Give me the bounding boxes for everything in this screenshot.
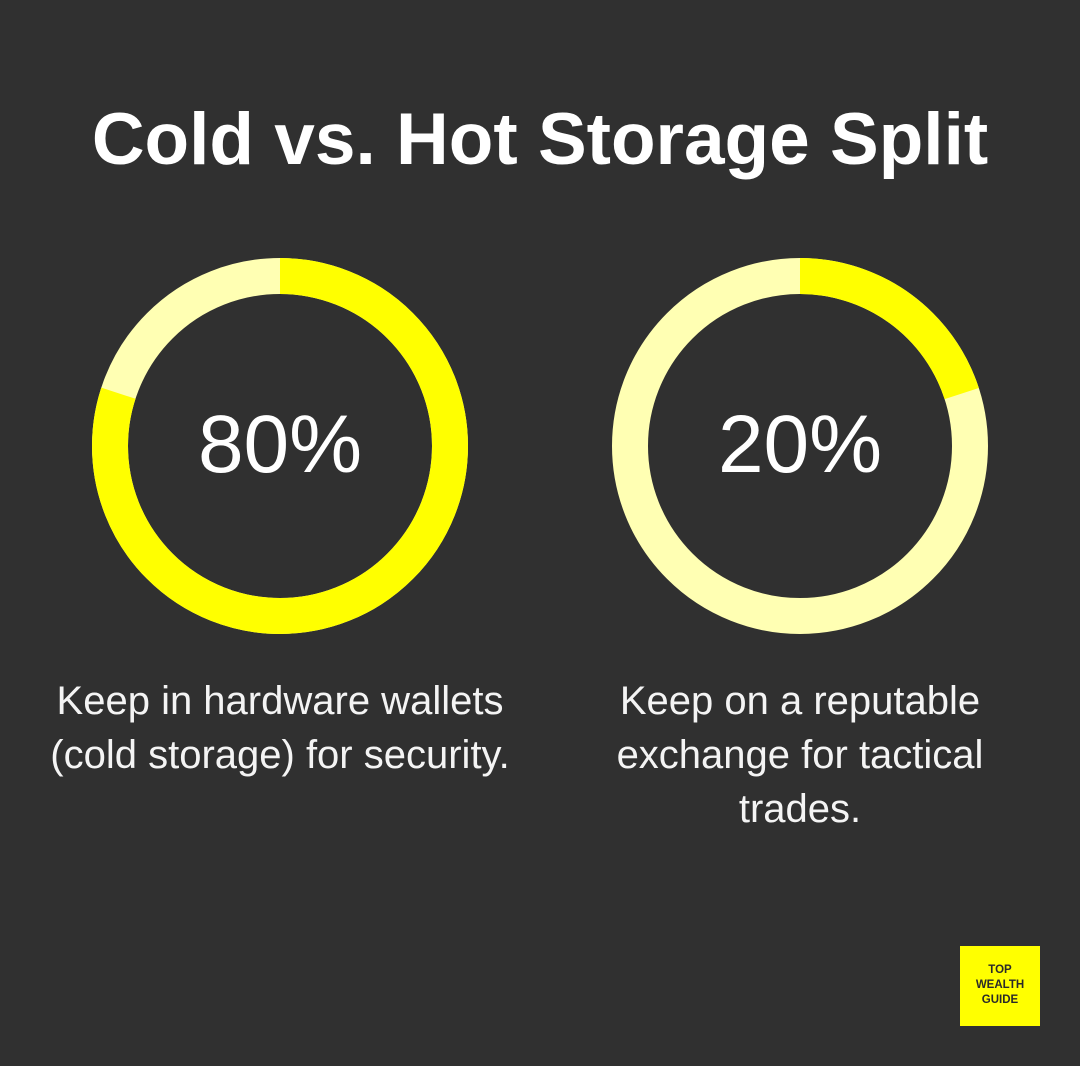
caption: cold storage: (cold storage) for security. [50,733,510,777]
logo: TOP [988,964,1012,976]
caption: hot storage: exchange for tactical [617,733,983,777]
donut: 20% [630,276,970,616]
title: Cold vs. Hot Storage Split [92,99,988,180]
caption: hot storage: trades. [739,787,861,831]
caption: hot storage [617,679,983,831]
donut: 80% [110,276,450,616]
caption: cold storage: Keep in hardware wallets [57,679,503,723]
logo [960,946,1040,1026]
donut charts [92,258,988,634]
caption: cold storage [50,679,510,777]
donut: 80%: 80% [198,399,362,490]
donut: 20%: 20% [718,399,882,490]
caption: hot storage: Keep on a reputable [620,679,980,723]
logo: WEALTH [976,979,1024,991]
logo: GUIDE [982,994,1018,1006]
